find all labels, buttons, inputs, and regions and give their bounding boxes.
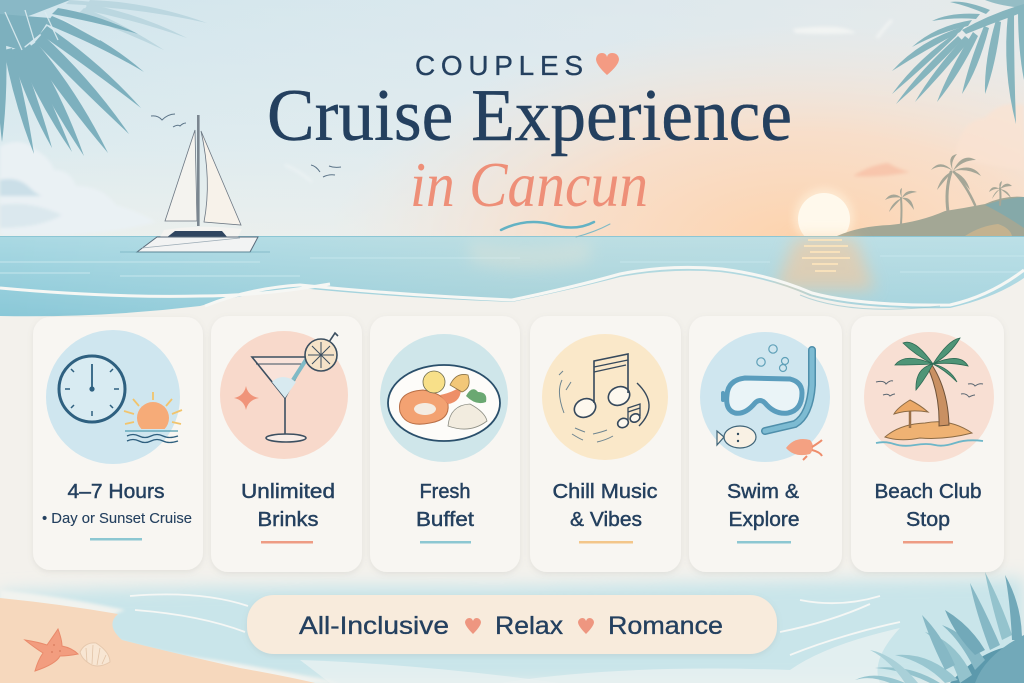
background: sky	[0, 0, 1024, 240]
label: 4–7 hours: 4–7 Hours	[68, 480, 164, 503]
icon: snorkel mask	[721, 345, 812, 431]
card: swim	[689, 316, 842, 572]
subtitle: in cancun: in Cancun	[410, 149, 648, 220]
icon: plate of food	[388, 365, 500, 441]
label: swim & explore: Swim &	[727, 480, 799, 503]
card: beach club: Stop	[906, 508, 950, 531]
label: beach club stop: Beach Club	[874, 480, 982, 503]
icon: sparkle	[234, 386, 259, 410]
palm frond: top left	[0, 0, 207, 156]
icon: music notes	[559, 354, 649, 442]
underline swoosh	[501, 222, 610, 237]
icon: setting sun over waves	[124, 392, 182, 442]
label: chill music & vibes: Chill Music	[552, 480, 658, 503]
sea	[0, 236, 1024, 326]
plant: bottom right	[855, 572, 1024, 683]
palm frond: top right	[892, 0, 1024, 124]
card: beach club	[851, 316, 1004, 572]
sublabel: day or sunset cruise: • Day or Sunset Cruise	[42, 511, 192, 527]
label: fresh buffet: Fresh	[420, 480, 470, 503]
bottom water	[0, 578, 1024, 683]
icon: heart	[465, 618, 481, 634]
sun reflection	[775, 238, 875, 290]
title: couples: COUPLES	[415, 50, 583, 81]
sailboat	[120, 115, 270, 252]
card: drinks: Brinks	[258, 508, 318, 531]
icon: white fish	[717, 426, 756, 448]
card: buffet	[370, 316, 520, 572]
card: music	[530, 316, 681, 572]
icon: island with palm	[876, 338, 983, 446]
lower background	[0, 267, 1024, 683]
card: swim: Explore	[728, 508, 800, 531]
pill banner: All-Inclusive	[299, 612, 449, 640]
card: drinks	[211, 316, 362, 572]
card: music: & Vibes	[570, 508, 642, 531]
icon: beach umbrella	[894, 400, 928, 428]
clouds: left	[0, 142, 312, 235]
icon: orange fish	[786, 439, 822, 460]
pill banner	[247, 595, 777, 654]
icon: martini glass	[252, 333, 338, 442]
icon: heart	[578, 618, 594, 634]
card: buffet: Buffet	[416, 508, 474, 531]
beach sand	[0, 590, 340, 683]
icon: clock	[59, 356, 125, 422]
title: cruise experience: Cruise Experience	[267, 75, 792, 157]
label: unlimited brinks: Unlimited	[241, 480, 335, 503]
starfish	[25, 629, 78, 671]
sun	[792, 188, 855, 236]
icon: title heart	[596, 53, 619, 75]
birds	[151, 114, 341, 177]
pill banner: Romance	[608, 612, 723, 640]
clouds: right	[793, 20, 1024, 176]
island with palms	[837, 154, 1024, 236]
pill banner: Relax	[495, 612, 564, 640]
card: duration	[33, 317, 203, 570]
seashell	[80, 643, 110, 666]
